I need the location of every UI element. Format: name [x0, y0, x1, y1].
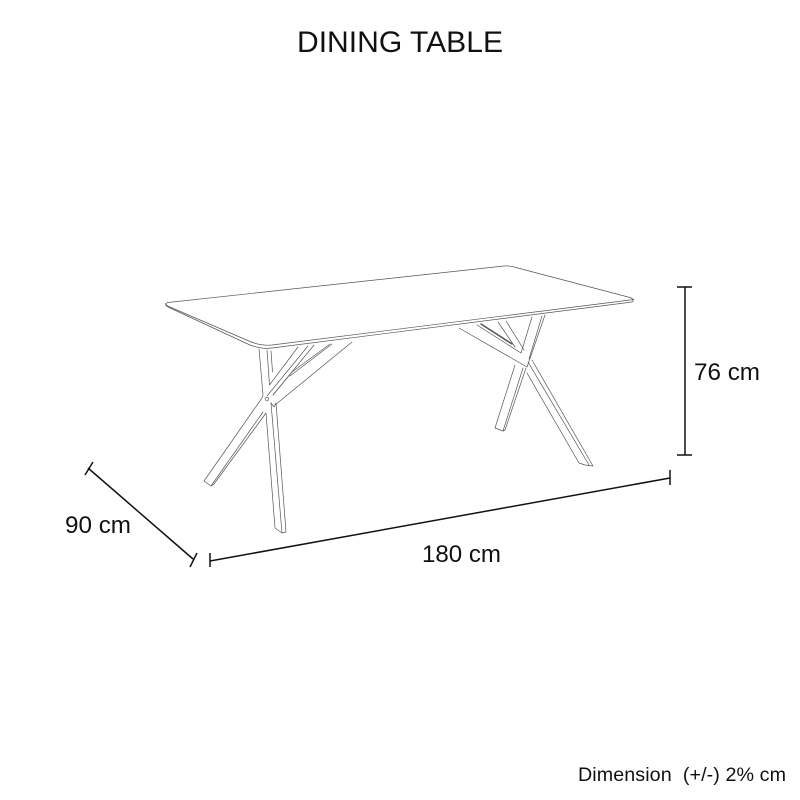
right legs — [459, 315, 593, 466]
table top — [166, 266, 634, 348]
title: DINING TABLE — [297, 26, 503, 59]
dimension: width — [210, 470, 670, 567]
dimension: depth — [85, 462, 197, 567]
left legs — [204, 342, 352, 533]
footnote: Dimension (+/-) 2% cm — [578, 764, 786, 786]
width label: 180 cm — [422, 541, 501, 568]
dimension: height — [677, 287, 692, 455]
height label: 76 cm — [694, 359, 760, 386]
depth label: 90 cm — [65, 512, 131, 539]
table drawing — [166, 266, 634, 533]
